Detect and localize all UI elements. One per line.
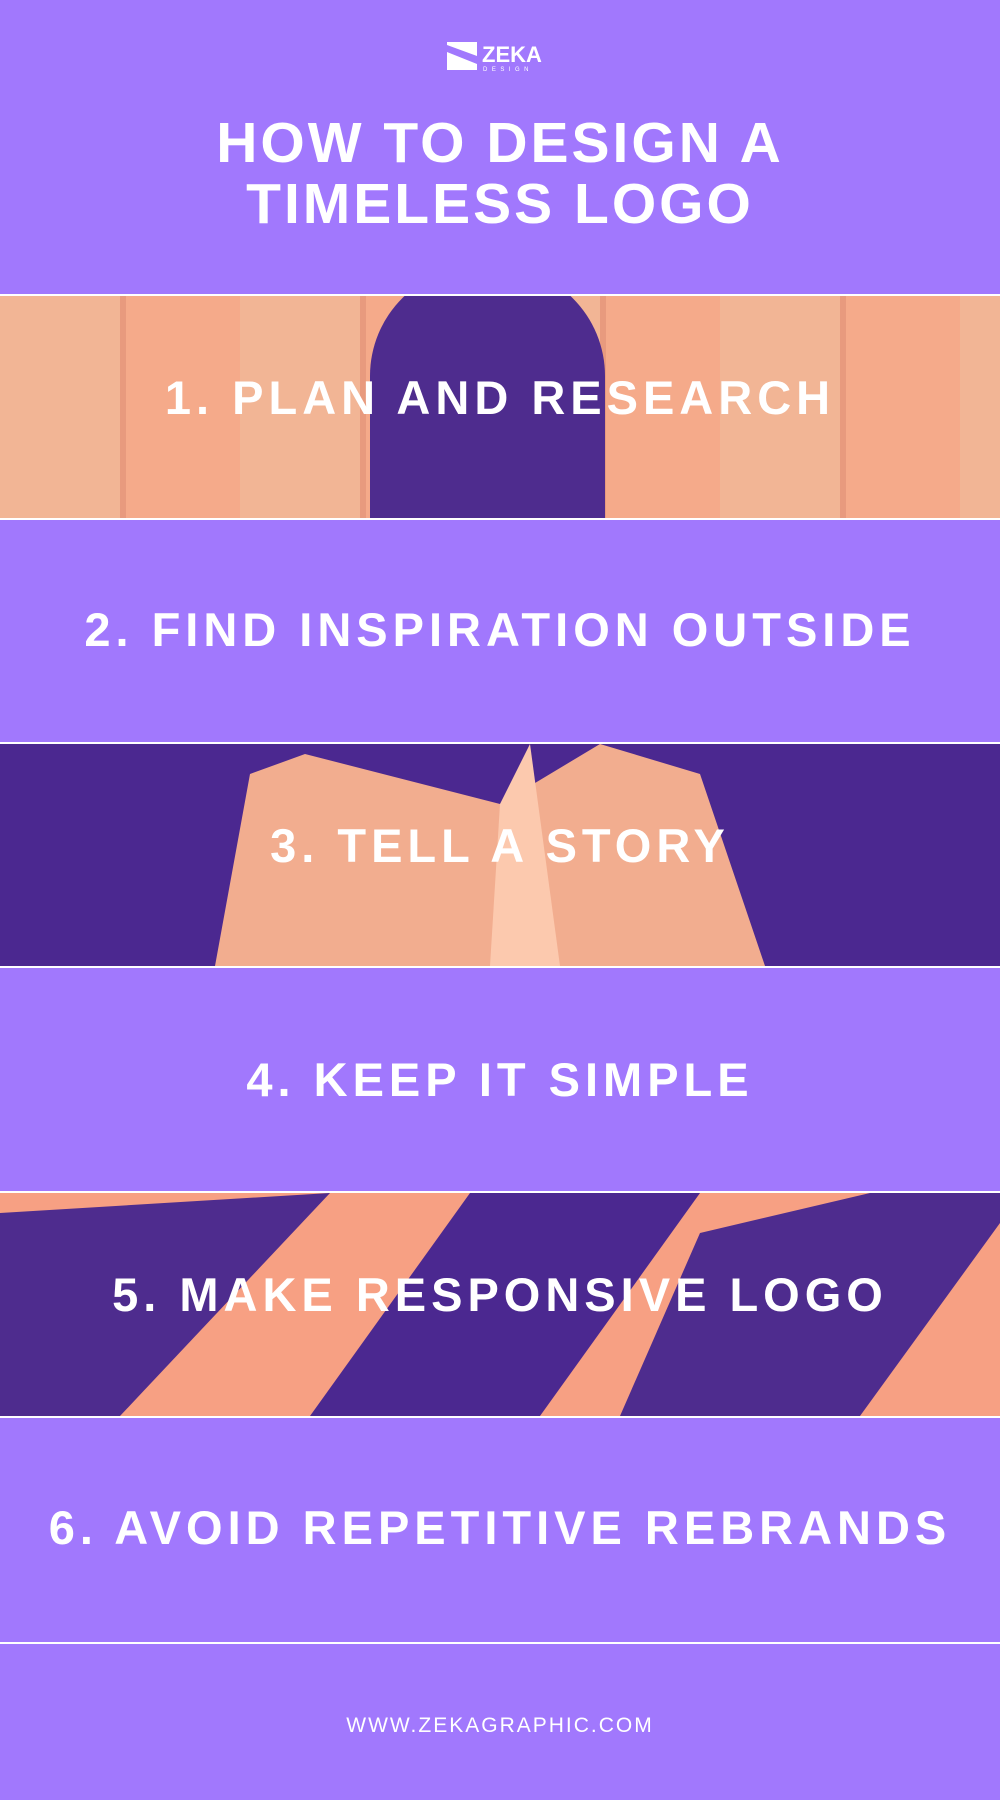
icon: zeka logo: ZEKA (482, 42, 542, 67)
panel: step 4 (0, 968, 1000, 1191)
panel: step 1: 1. PLAN AND RESEARCH (165, 370, 835, 424)
title: TIMELESS LOGO (246, 172, 754, 236)
footer (0, 1644, 1000, 1800)
panel: step 5 (0, 1193, 1000, 1416)
panel: step 3: 3. TELL A STORY (270, 818, 730, 872)
panel: step 1 (0, 296, 1000, 518)
icon: zeka logo (447, 42, 542, 72)
panel: step 2: 2. FIND INSPIRATION OUTSIDE (84, 602, 916, 656)
panel: step 5: 5. MAKE RESPONSIVE LOGO (112, 1268, 888, 1321)
title: HOW TO DESIGN A (216, 111, 784, 175)
panel: step 6: 6. AVOID REPETITIVE REBRANDS (49, 1500, 951, 1554)
panel: step 6 (0, 1418, 1000, 1642)
panel: step 4: 4. KEEP IT SIMPLE (246, 1053, 754, 1106)
panel: step 3 (0, 744, 1000, 966)
footer url: WWW.ZEKAGRAPHIC.COM (346, 1714, 654, 1737)
header panel (0, 0, 1000, 294)
title (216, 111, 784, 236)
panel: step 2 (0, 520, 1000, 742)
